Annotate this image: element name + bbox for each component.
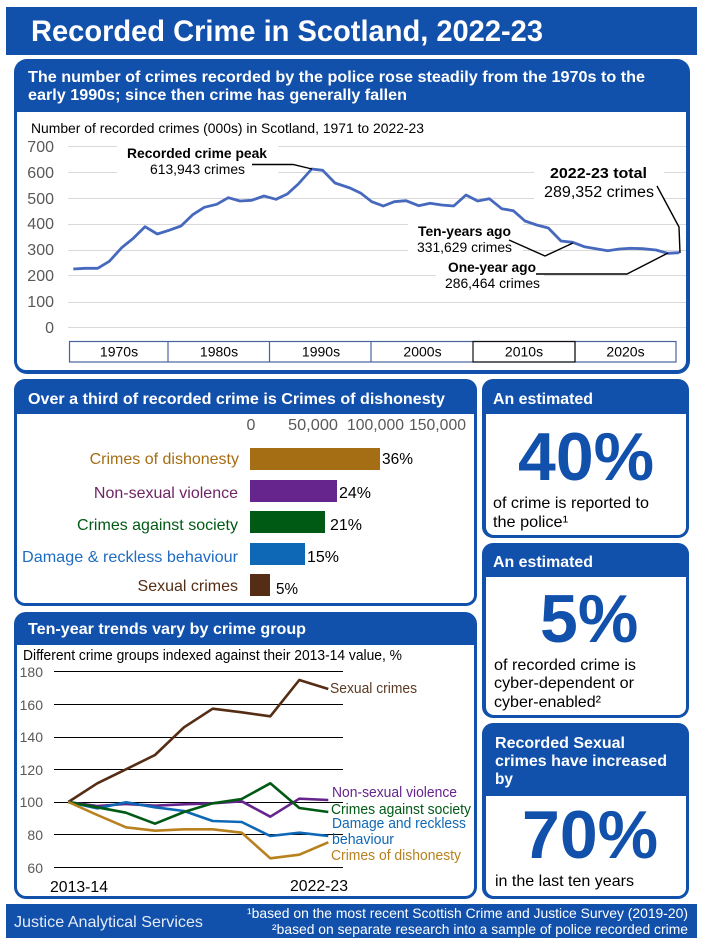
bar: crimes of dishonesty: 36% <box>382 451 413 468</box>
line chart: recorded crimes 1971 to 2022-23: 100 <box>27 294 54 311</box>
series labels: Crimes of dishonesty <box>331 848 462 864</box>
series labels: Crimes against society <box>331 802 472 818</box>
line chart: recorded crimes 1971 to 2022-23 <box>27 139 686 337</box>
title banner: Recorded Crime in Scotland, 2022-23 <box>31 15 543 48</box>
panel: ten-year trends <box>14 612 477 899</box>
heading: long-term trend: early 1990s; since then crime has generally fallen <box>28 87 407 104</box>
line chart: recorded crimes 1971 to 2022-23: 300 <box>27 242 54 259</box>
heading: sexual crimes increase: Recorded Sexual <box>495 735 625 752</box>
line chart: recorded crimes 1971 to 2022-23: 0 <box>45 320 54 337</box>
series labels: Sexual crimes <box>330 681 417 697</box>
heading: long-term trend <box>28 69 645 104</box>
bar: sexual crimes <box>138 574 298 598</box>
bar: sexual crimes: Sexual crimes <box>138 578 238 595</box>
footnotes <box>247 905 688 937</box>
callout: ten years ago <box>417 223 573 256</box>
heading: an estimated: An estimated <box>493 554 593 571</box>
bar: damage and reckless behaviour: Damage & reckless behaviour <box>22 549 239 566</box>
line chart: indexed crime groups: 140 <box>20 729 43 745</box>
bar: non-sexual violence: 24% <box>339 485 371 502</box>
callout: 2022-23 total: 289,352 crimes <box>544 184 654 201</box>
bar: crimes against society <box>77 511 362 534</box>
decade axis: 1990s <box>302 344 340 360</box>
footer: Justice Analytical Services <box>14 914 203 931</box>
stat caption <box>494 657 636 711</box>
bar: damage and reckless behaviour: 15% <box>307 549 339 566</box>
stat caption: cyber-enabled² <box>494 694 602 711</box>
bar axis labels: 0 <box>246 417 256 434</box>
panel: 70% sexual crimes <box>482 723 689 899</box>
footnotes: ²based on separate research into a sample of police recorded crime <box>272 921 688 937</box>
bar: crimes against society: 21% <box>330 517 362 534</box>
stat caption: cyber-dependent or <box>494 675 635 692</box>
series labels: Non-sexual violence <box>332 785 457 801</box>
stat: 5%: 5% <box>540 581 638 657</box>
bar axis labels: 100,000 <box>347 417 404 434</box>
callout: ten years ago: Ten-years ago <box>418 223 511 239</box>
series labels: behaviour <box>332 832 394 848</box>
bar: non-sexual violence: Non-sexual violence <box>94 485 238 502</box>
heading: long-term trend: The number of crimes recorded by the police rose steadily from the 1970s to the <box>28 69 645 86</box>
stat caption: of recorded crime is <box>494 657 636 674</box>
callout: 2022-23 total: 2022-23 total <box>550 165 647 182</box>
callout: one year ago: One-year ago <box>448 259 536 275</box>
line chart: recorded crimes 1971 to 2022-23: 600 <box>27 165 54 182</box>
panel: 40% reported <box>482 379 689 538</box>
bar axis labels: 50,000 <box>288 417 338 434</box>
decade axis: 2000s <box>403 344 442 360</box>
panel: 5% cyber <box>482 543 689 718</box>
callout: ten years ago: 331,629 crimes <box>417 239 512 255</box>
panel: long-term recorded crime <box>14 59 690 374</box>
series labels <box>330 681 472 864</box>
bar: non-sexual violence <box>94 480 371 502</box>
line chart: indexed crime groups: 2013-14 <box>50 879 108 896</box>
bar: sexual crimes: 5% <box>276 581 298 598</box>
line chart: recorded crimes 1971 to 2022-23: 400 <box>27 216 54 233</box>
line chart: indexed crime groups: 60 <box>27 860 43 876</box>
footer <box>6 904 697 938</box>
heading: ten-year trends: Ten-year trends vary by crime group <box>28 621 306 638</box>
heading: sexual crimes increase <box>495 735 667 788</box>
decade axis: 2010s <box>505 344 543 360</box>
line chart: indexed crime groups <box>20 664 348 896</box>
callout: one year ago <box>445 253 668 291</box>
line chart: recorded crimes 1971 to 2022-23: 200 <box>27 268 54 285</box>
bar: crimes of dishonesty: Crimes of dishonesty <box>90 451 239 468</box>
callout: one year ago: 286,464 crimes <box>445 275 540 291</box>
line chart: recorded crimes 1971 to 2022-23: 700 <box>27 139 54 156</box>
line chart: indexed crime groups: 120 <box>20 762 43 778</box>
heading: crime share: Over a third of recorded crime is Crimes of dishonesty <box>28 391 445 408</box>
chart subtitle: Number of recorded crimes (000s) in Scotland, 1971 to 2022-23 <box>31 120 424 136</box>
stat caption: the police¹ <box>493 514 568 531</box>
decade axis: 2020s <box>606 344 645 360</box>
bar axis labels <box>246 417 466 434</box>
heading: an estimated: An estimated <box>493 391 593 408</box>
stat: 70%: 70% <box>522 797 658 873</box>
callout: recorded crime peak <box>127 145 312 177</box>
stat caption: in the last ten years <box>495 873 634 890</box>
callout: recorded crime peak: Recorded crime peak <box>127 145 267 161</box>
decade axis <box>70 342 676 362</box>
title banner <box>6 7 697 55</box>
stat caption <box>493 495 649 531</box>
line chart: recorded crimes 1971 to 2022-23: 500 <box>27 191 54 208</box>
line chart: indexed crime groups: 100 <box>20 794 43 810</box>
decade axis: 1980s <box>200 344 238 360</box>
callout: recorded crime peak: 613,943 crimes <box>150 161 245 177</box>
line chart: indexed crime groups: 160 <box>20 697 43 713</box>
line chart: indexed crime groups: 2022-23 <box>290 878 348 895</box>
stat caption: of crime is reported to <box>493 495 649 512</box>
bar: damage and reckless behaviour <box>22 543 339 566</box>
chart subtitle: Different crime groups indexed against their 2013-14 value, % <box>23 648 402 664</box>
series labels: Damage and reckless <box>332 816 466 832</box>
callout: 2022-23 total <box>544 165 680 253</box>
heading: sexual crimes increase: by <box>495 771 513 788</box>
bar: crimes against society: Crimes against society <box>77 517 238 534</box>
line chart: indexed crime groups: 80 <box>27 827 43 843</box>
bar: crimes of dishonesty <box>90 448 413 470</box>
bar axis labels: 150,000 <box>409 417 466 434</box>
footnotes: ¹based on the most recent Scottish Crime and Justice Survey (2019-20) <box>247 905 688 921</box>
line chart: indexed crime groups: 180 <box>20 664 43 680</box>
stat: 40%: 40% <box>518 419 654 495</box>
heading: sexual crimes increase: crimes have increased <box>495 753 667 770</box>
panel: crime groups share <box>14 379 477 606</box>
decade axis: 1970s <box>100 344 138 360</box>
